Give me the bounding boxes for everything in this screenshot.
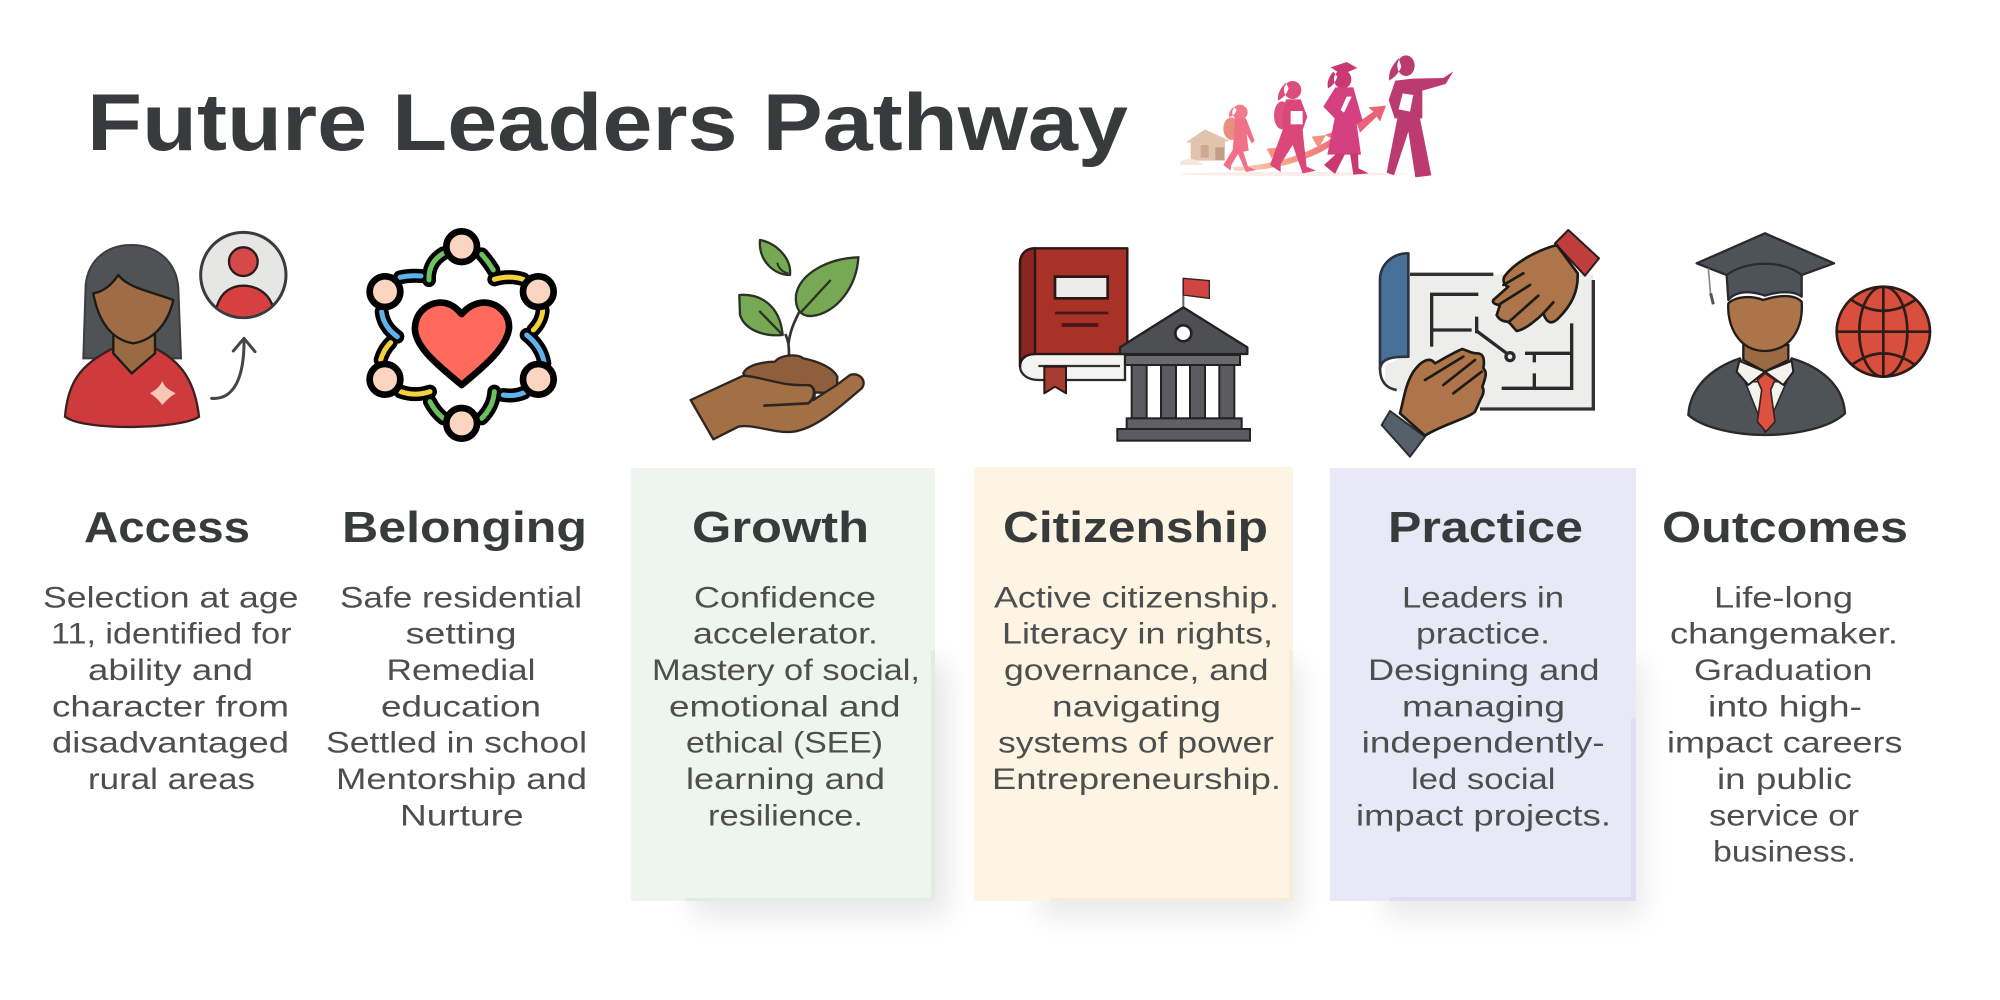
text block: access description: ability and <box>88 654 253 687</box>
text block: growth description: accelerator. <box>693 618 878 651</box>
text block: belonging description: Mentorship and <box>336 763 587 796</box>
heading: outcomes: Outcomes <box>1662 503 1908 552</box>
column: belonging <box>326 503 587 832</box>
column: citizenship <box>992 503 1281 796</box>
column: outcomes <box>1662 503 1908 869</box>
text block: outcomes description: in public <box>1717 763 1852 796</box>
panel: citizenship background <box>974 467 1300 917</box>
text block: practice description: Designing and <box>1368 654 1600 687</box>
text block: practice description: practice. <box>1416 618 1550 651</box>
text block: growth description: ethical (SEE) <box>686 727 883 760</box>
text block: access description: rural areas <box>88 763 255 796</box>
text block: practice description: independently- <box>1362 727 1605 760</box>
text block: outcomes description: Life-long <box>1714 581 1853 614</box>
heading: practice: Practice <box>1388 503 1583 552</box>
text block: outcomes description: business. <box>1713 836 1856 869</box>
text block: belonging description: education <box>381 690 541 723</box>
icon: book and civic building <box>1020 248 1250 441</box>
text block: growth description: Mastery of social, <box>652 654 920 687</box>
text block: practice description: led social <box>1411 763 1556 796</box>
text block: citizenship description: Active citizenship. <box>994 581 1279 614</box>
icon: pathway silhouettes from home to leader <box>1180 55 1453 177</box>
text block: citizenship description: navigating <box>1052 690 1221 723</box>
heading: belonging: Belonging <box>342 503 587 552</box>
text block: growth description: learning and <box>686 763 885 796</box>
text block: access description: disadvantaged <box>52 727 289 760</box>
text block: belonging description: Remedial <box>386 654 536 687</box>
text block: growth description: emotional and <box>669 690 900 723</box>
text block: belonging description: Nurture <box>400 799 524 832</box>
column: practice <box>1356 503 1611 832</box>
icon: circle of people around a heart <box>370 231 554 439</box>
title: Future Leaders Pathway <box>87 78 1128 168</box>
text block: belonging description: Safe residential <box>340 581 582 614</box>
text block: outcomes description: impact careers <box>1667 727 1902 760</box>
text block: citizenship description <box>992 581 1281 796</box>
text block: citizenship description: governance, and <box>1004 654 1268 687</box>
text block: outcomes description: Graduation <box>1694 654 1872 687</box>
heading: growth: Growth <box>692 503 869 552</box>
text block: outcomes description: changemaker. <box>1670 618 1898 651</box>
text block: citizenship description: systems of power <box>998 727 1274 760</box>
text block: practice description <box>1356 581 1611 832</box>
text block: practice description: managing <box>1402 690 1565 723</box>
text block: outcomes description: service or <box>1709 799 1859 832</box>
text block: access description: character from <box>52 690 289 723</box>
text block: growth description <box>652 581 920 832</box>
text block: access description: 11, identified for <box>51 618 292 651</box>
text block: access description <box>43 581 298 796</box>
icon: student with selection avatar <box>65 232 286 427</box>
text block: growth description: resilience. <box>708 799 863 832</box>
heading: access: Access <box>84 503 250 552</box>
icon: graduate with globe <box>1688 233 1930 435</box>
text block: belonging description: setting <box>406 618 517 651</box>
panel: practice background <box>1330 468 1643 917</box>
text block: belonging description: Settled in school <box>326 727 587 760</box>
text block: belonging description <box>326 581 587 832</box>
heading: citizenship: Citizenship <box>1003 503 1268 552</box>
panel: growth background <box>631 468 948 917</box>
text block: outcomes description: into high- <box>1708 690 1862 723</box>
text block: practice description: Leaders in <box>1402 581 1564 614</box>
text block: outcomes description <box>1667 581 1902 869</box>
text block: citizenship description: Literacy in rights, <box>1002 618 1273 651</box>
text block: access description: Selection at age <box>43 581 298 614</box>
text block: growth description: Confidence <box>694 581 876 614</box>
icon: hands over a blueprint <box>1380 230 1599 457</box>
column: growth <box>652 503 920 832</box>
text block: citizenship description: Entrepreneurship. <box>992 763 1281 796</box>
column: access <box>43 503 298 796</box>
text block: practice description: impact projects. <box>1356 799 1611 832</box>
icon: hand holding a seedling <box>691 240 864 439</box>
